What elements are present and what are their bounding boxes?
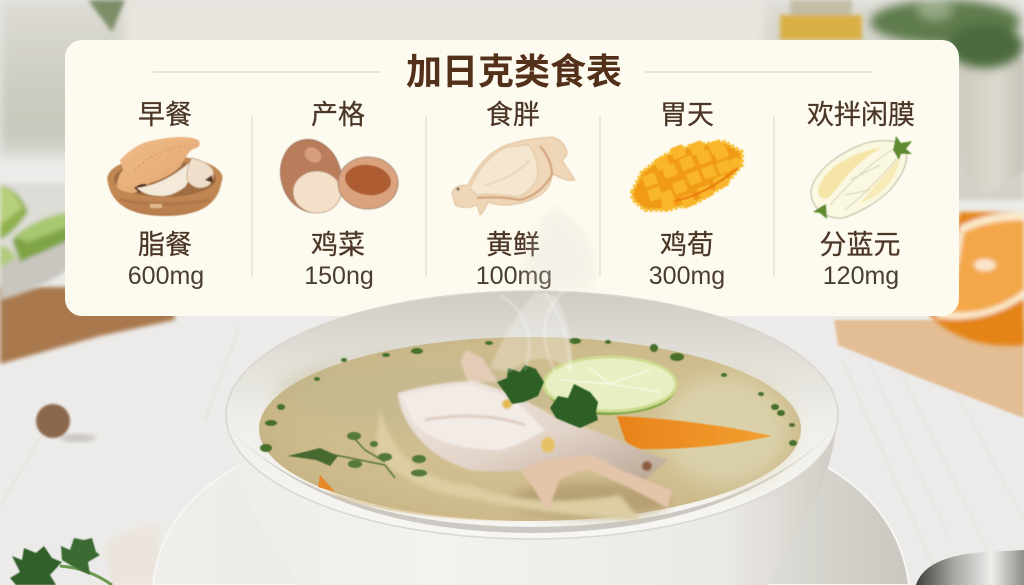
column 1 food name: 脂餐 xyxy=(138,230,192,260)
carrot slice xyxy=(617,416,772,449)
column 3 heading: 食胖 xyxy=(486,100,540,130)
column 5 food name: 分蓝元 xyxy=(820,230,900,260)
title rule left xyxy=(153,71,380,73)
background: right wooden board xyxy=(834,320,1024,418)
herb sprig xyxy=(288,432,427,478)
column 3 amount: 100mg xyxy=(476,262,552,290)
background: halved orange xyxy=(930,212,1024,346)
background: green plant xyxy=(870,0,1023,68)
column 3 food name: 黄鲜 xyxy=(486,230,540,260)
spoon xyxy=(916,550,1024,585)
icon: diced mango xyxy=(632,139,743,212)
column 1: breakfast xyxy=(107,100,222,290)
column 4 heading: 胃天 xyxy=(660,100,714,130)
column 2 amount: 150ng xyxy=(304,262,374,290)
background: left wooden board xyxy=(0,287,175,364)
icon: abalone xyxy=(452,137,575,215)
background: oil bottle xyxy=(780,0,862,40)
column divider xyxy=(251,116,253,277)
faint steam over the card xyxy=(524,205,595,292)
column divider xyxy=(425,116,427,277)
column 4: mango xyxy=(632,100,743,290)
column 4 amount: 300mg xyxy=(649,262,725,290)
title: 加日克类食表 xyxy=(406,51,622,92)
column 3: abalone xyxy=(452,100,575,290)
bowl rim and inner wall xyxy=(226,291,838,539)
column 1 heading: 早餐 xyxy=(138,100,192,130)
rim front shadow xyxy=(228,428,836,533)
background: nutmeg xyxy=(36,404,96,442)
herb flecks along the broth edge xyxy=(260,338,797,452)
cilantro garnish bottom left xyxy=(10,538,112,585)
column 2 heading: 产格 xyxy=(311,100,365,130)
column 5 amount: 120mg xyxy=(823,262,899,290)
broth xyxy=(259,337,801,521)
info card xyxy=(65,40,959,316)
column 4 food name: 鸡荀 xyxy=(660,230,714,260)
column divider xyxy=(773,116,775,277)
column divider xyxy=(599,116,601,277)
icon: napa cabbage xyxy=(811,136,912,219)
icon: chicken in basket xyxy=(107,137,222,216)
background: ceramic pot xyxy=(960,60,1024,195)
background: doily xyxy=(105,526,160,585)
lime slice xyxy=(544,357,677,415)
steam xyxy=(490,290,572,372)
column 5: napa cabbage xyxy=(807,100,915,290)
shredded chicken under the broth xyxy=(375,410,640,520)
title rule right xyxy=(645,71,872,73)
bowl body xyxy=(226,415,838,585)
soup bowl xyxy=(226,291,838,585)
background: plate with lime slices xyxy=(0,183,70,300)
column 1 amount: 600mg xyxy=(128,262,204,290)
column 5 heading: 欢拌闲膜 xyxy=(807,100,915,130)
chicken breast xyxy=(398,350,672,508)
column 2 food name: 鸡菜 xyxy=(311,230,365,260)
cilantro leaves on the soup xyxy=(497,365,598,428)
saucer xyxy=(153,467,909,585)
column 2: egg xyxy=(272,100,398,290)
icon: tea egg xyxy=(272,132,398,220)
